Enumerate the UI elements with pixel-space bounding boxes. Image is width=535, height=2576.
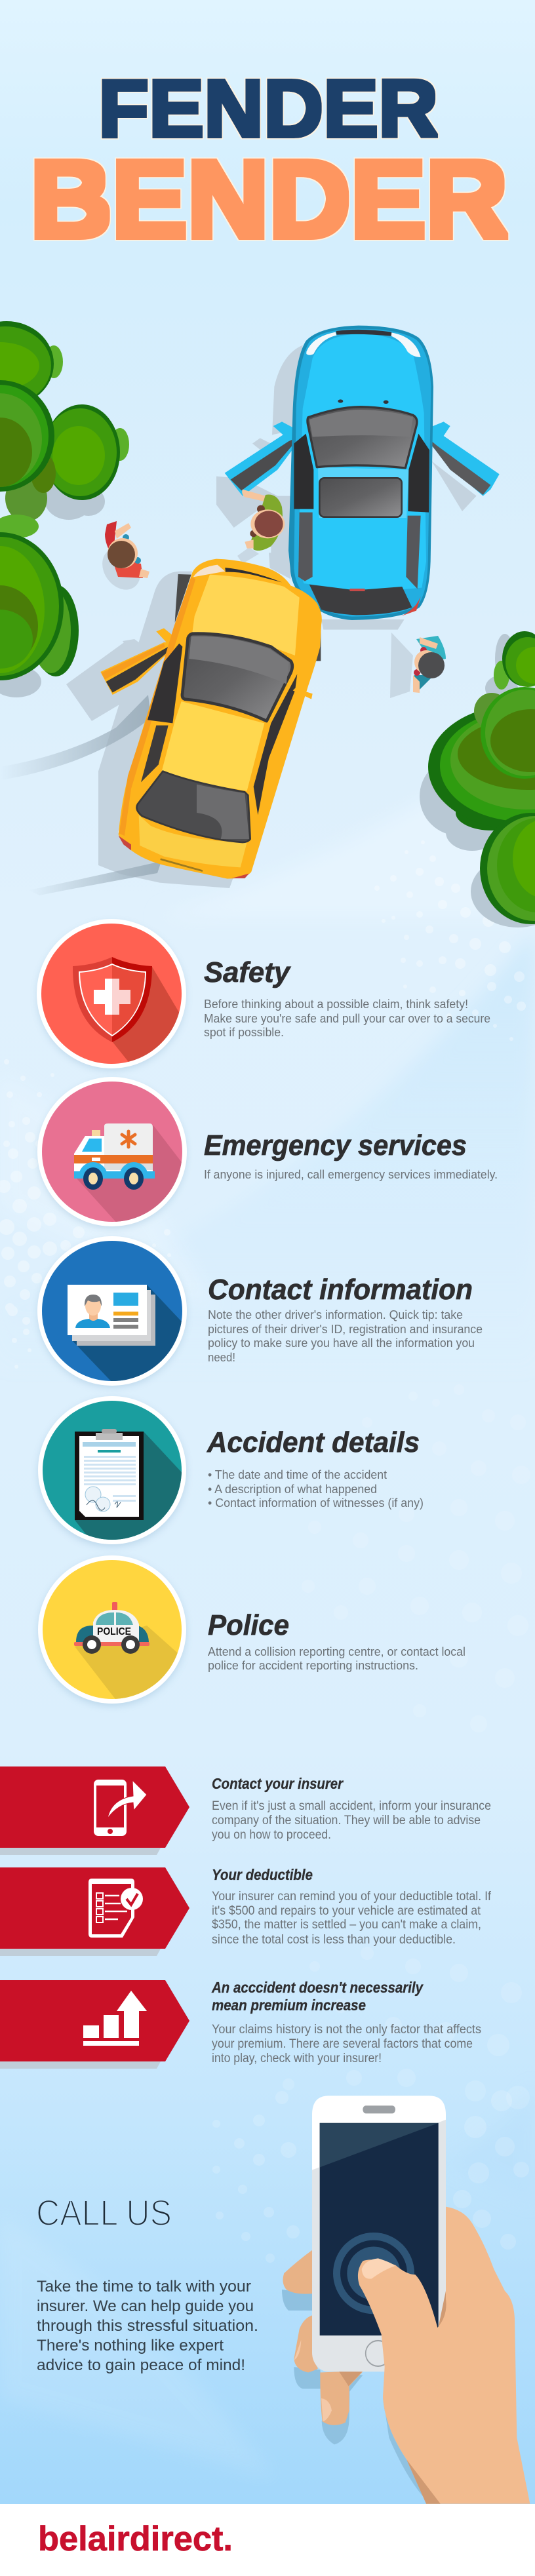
logo: belairdirect: belairdirect. bbox=[38, 2520, 233, 2558]
text: premium increase body: your premium. There are several factors that come bbox=[212, 2037, 473, 2051]
text: accident details list: • A description of what happened bbox=[208, 1483, 377, 1496]
text: your deductible body: Your insurer can remind you of your deductible total. If bbox=[212, 1890, 492, 1903]
text: your deductible body: $350, the matter is settled – you can't make a claim, bbox=[212, 1918, 481, 1932]
text: contact information body: policy to make sure you have all the information you bbox=[208, 1337, 475, 1350]
heading: your deductible: Your deductible bbox=[212, 1866, 313, 1883]
finger shadows bbox=[282, 2290, 426, 2500]
text: contact information body: need! bbox=[208, 1351, 235, 1364]
panel: call us bbox=[36, 2096, 530, 2504]
tree bottom right bbox=[480, 813, 535, 924]
text: accident details list: • The date and time of the accident bbox=[208, 1468, 387, 1481]
tree middle bbox=[43, 404, 129, 500]
text: police body: Attend a collision reporting centre, or contact local bbox=[208, 1645, 466, 1658]
heading: police: Police bbox=[208, 1609, 289, 1641]
text: police body: police for accident reporting instructions. bbox=[208, 1659, 418, 1672]
body bbox=[119, 559, 322, 879]
arrow banner with checklist icon bbox=[0, 1867, 189, 1956]
icon: police car badge bbox=[38, 1555, 186, 1706]
panel: contact information bbox=[37, 1236, 483, 1387]
footer bbox=[0, 2504, 535, 2576]
person: green shirt bbox=[242, 490, 285, 551]
panel: your deductible bbox=[0, 1866, 492, 1956]
heading: premium increase: mean premium increase bbox=[212, 1997, 366, 2014]
tree shadows bbox=[0, 477, 535, 927]
hand bbox=[438, 2291, 452, 2328]
icon: ambulance badge bbox=[37, 1077, 190, 1228]
text: contact information body bbox=[208, 1308, 483, 1364]
rear window bbox=[136, 771, 250, 842]
body bbox=[288, 326, 433, 620]
heading: emergency services: Emergency services bbox=[204, 1129, 467, 1161]
yellow car bbox=[100, 559, 322, 879]
text: call us body bbox=[37, 2278, 258, 2374]
text: call us body: insurer. We can help guide you bbox=[37, 2297, 254, 2315]
panel: police bbox=[38, 1555, 466, 1706]
fingers bbox=[283, 2250, 363, 2425]
text: contact information body: pictures of their driver's ID, registration and insurance bbox=[208, 1323, 483, 1336]
illustration: hand holding phone bbox=[282, 2096, 530, 2504]
heading: call us: CALL US bbox=[36, 2192, 172, 2233]
text: call us body: advice to gain peace of mind! bbox=[37, 2356, 245, 2374]
text: premium increase body: into play, check with your insurer! bbox=[212, 2052, 382, 2065]
text: police body bbox=[208, 1645, 466, 1672]
text: your deductible body bbox=[212, 1890, 492, 1947]
heading: FENDER: FENDER bbox=[98, 64, 438, 154]
illustration: collision scene bbox=[0, 321, 535, 927]
heading: premium increase: An acccident doesn't necessarily bbox=[211, 1979, 424, 1996]
text: contact your insurer body bbox=[212, 1799, 491, 1842]
tree top right bbox=[494, 631, 535, 690]
text: safety body: Before thinking about a possible claim, think safety! bbox=[204, 998, 468, 1011]
heading: accident details: Accident details bbox=[207, 1426, 420, 1458]
person: teal shirt bbox=[413, 636, 446, 693]
text: accident details list: • Contact information of witnesses (if any) bbox=[208, 1496, 424, 1510]
arrow banner with phone icon bbox=[0, 1766, 189, 1855]
vehicle and door shadows bbox=[66, 345, 477, 888]
tree top left bbox=[0, 321, 63, 406]
door: right bbox=[420, 421, 500, 496]
tree bottom left bbox=[0, 515, 79, 680]
tree large left bbox=[0, 380, 56, 522]
side windows bbox=[148, 644, 182, 723]
windshield bbox=[182, 634, 292, 721]
door bbox=[100, 642, 179, 695]
panel: safety bbox=[37, 919, 490, 1082]
text: call us body: through this stressful situation. bbox=[37, 2317, 258, 2335]
panel: accident details bbox=[38, 1396, 424, 1546]
text: contact information body: Note the other driver's information. Quick tip: take bbox=[208, 1308, 463, 1321]
panel: emergency services bbox=[37, 1077, 498, 1228]
text: your deductible body: since the total cost is less than your deductible. bbox=[212, 1933, 456, 1947]
tree large right bbox=[428, 687, 535, 830]
text: contact your insurer body: you on how to proceed. bbox=[212, 1828, 331, 1842]
person: red shirt bbox=[105, 521, 149, 578]
heading: premium increase bbox=[211, 1979, 424, 2014]
text: call us body: Take the time to talk with your bbox=[37, 2278, 251, 2295]
icon: shield badge bbox=[37, 919, 197, 1082]
title bbox=[30, 64, 507, 260]
icon: id cards badge bbox=[37, 1236, 190, 1387]
blue car bbox=[225, 326, 500, 620]
trees: left side bbox=[0, 321, 129, 680]
heading: safety: Safety bbox=[204, 956, 291, 988]
phone bbox=[312, 2096, 446, 2371]
text: premium increase body bbox=[212, 2023, 481, 2065]
panel: contact your insurer bbox=[0, 1766, 491, 1855]
text: safety body: Make sure you're safe and pull your car over to a secure bbox=[204, 1012, 490, 1025]
skid marks bbox=[0, 695, 161, 895]
text: your deductible body: it's $500 and repairs to your vehicle are estimated at bbox=[212, 1904, 481, 1918]
door: left bbox=[225, 421, 306, 496]
text: contact your insurer body: company of the situation. They will be able to advise bbox=[212, 1814, 481, 1827]
text: contact your insurer body: Even if it's just a small accident, inform your insurance bbox=[212, 1799, 491, 1813]
text: premium increase body: Your claims history is not the only factor that affects bbox=[212, 2023, 481, 2037]
arrow banner with rising bars icon bbox=[0, 1980, 189, 2069]
heading: BENDER: BENDER bbox=[30, 139, 507, 260]
panel: premium increase bbox=[0, 1979, 481, 2069]
icon: police car badge: POLICE bbox=[97, 1626, 131, 1637]
text: safety body: spot if possible. bbox=[204, 1026, 284, 1039]
text: emergency services body: If anyone is injured, call emergency services immediately. bbox=[204, 1168, 498, 1181]
heading: contact information: Contact information bbox=[208, 1274, 473, 1306]
text: safety body bbox=[204, 998, 490, 1039]
icon: clipboard badge bbox=[38, 1396, 190, 1546]
text: call us body: There's nothing like expert bbox=[37, 2337, 224, 2354]
person shadows bbox=[94, 541, 413, 698]
trees: right side bbox=[428, 631, 535, 924]
heading: contact your insurer: Contact your insurer bbox=[212, 1775, 344, 1792]
text: accident details list bbox=[208, 1468, 424, 1510]
